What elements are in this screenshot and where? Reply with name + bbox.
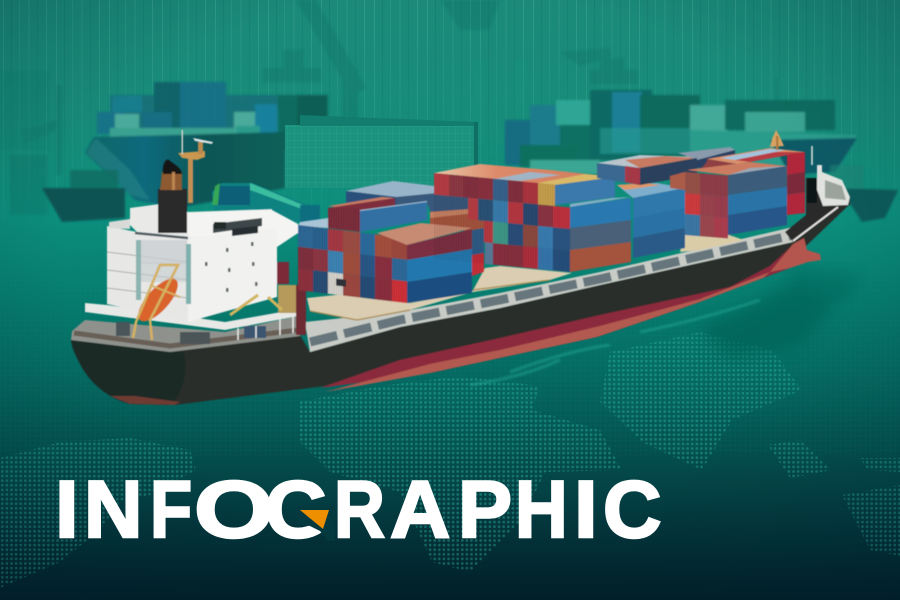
ghost green container (285, 115, 478, 188)
ghost hull left (85, 132, 285, 208)
world map dots (0, 332, 900, 588)
title: INFOGRAPHIC: A (390, 465, 450, 555)
ghost ship left (85, 82, 328, 208)
bow structure (785, 146, 850, 242)
title: INFOGRAPHIC: O (194, 465, 274, 555)
container stack: bow top strips (670, 148, 805, 215)
ghost train-like vessel behind funnel (212, 183, 320, 230)
mast and radar (178, 130, 213, 203)
hatch covers (307, 232, 744, 320)
container long: front block (377, 223, 472, 303)
cargo ship (71, 130, 850, 405)
container long: maroon and blue top left (328, 197, 427, 232)
red boot stripe (320, 243, 806, 388)
stern shadow (71, 340, 185, 405)
foremast (770, 130, 784, 150)
data lines overlay (3, 0, 895, 195)
crane arm on deck (230, 295, 282, 315)
title: INFOGRAPHIC: P (458, 465, 512, 555)
title: INFOGRAPHIC: I (55, 465, 79, 555)
ghost containers left (97, 82, 297, 138)
ghost small ship (42, 170, 125, 222)
container stack: bow block (685, 162, 787, 238)
container stack: back left (346, 181, 484, 276)
container stack: rear center (597, 147, 735, 185)
title: INFOGRAPHIC: H (515, 465, 568, 555)
title: INFOGRAPHIC: F (150, 465, 192, 555)
title: INFOGRAPHIC (55, 465, 662, 555)
container stack: center blue (617, 183, 685, 258)
ghost ship right (505, 90, 898, 222)
container stack: left pale top (298, 218, 328, 228)
superstructure (107, 204, 298, 322)
ghost crane and port silhouettes (0, 0, 778, 215)
stern deck and railing (71, 262, 306, 352)
title: INFOGRAPHIC: R (334, 465, 385, 555)
top surface main stack (434, 164, 615, 185)
main stack long side containers (555, 177, 631, 272)
bulbous bow (770, 238, 821, 272)
title: INFOGRAPHIC: G (265, 465, 330, 555)
lifeboat (132, 265, 184, 340)
title: INFOGRAPHIC: I (574, 465, 598, 555)
hull (71, 204, 850, 405)
container cells: left block (298, 225, 407, 303)
main deck strip (305, 227, 793, 352)
funnel (158, 160, 187, 233)
ghost bridge block (278, 95, 328, 150)
title: INFOGRAPHIC: C (603, 465, 662, 555)
title: INFOGRAPHIC: N (84, 465, 142, 555)
container cells: main stack (434, 173, 570, 272)
